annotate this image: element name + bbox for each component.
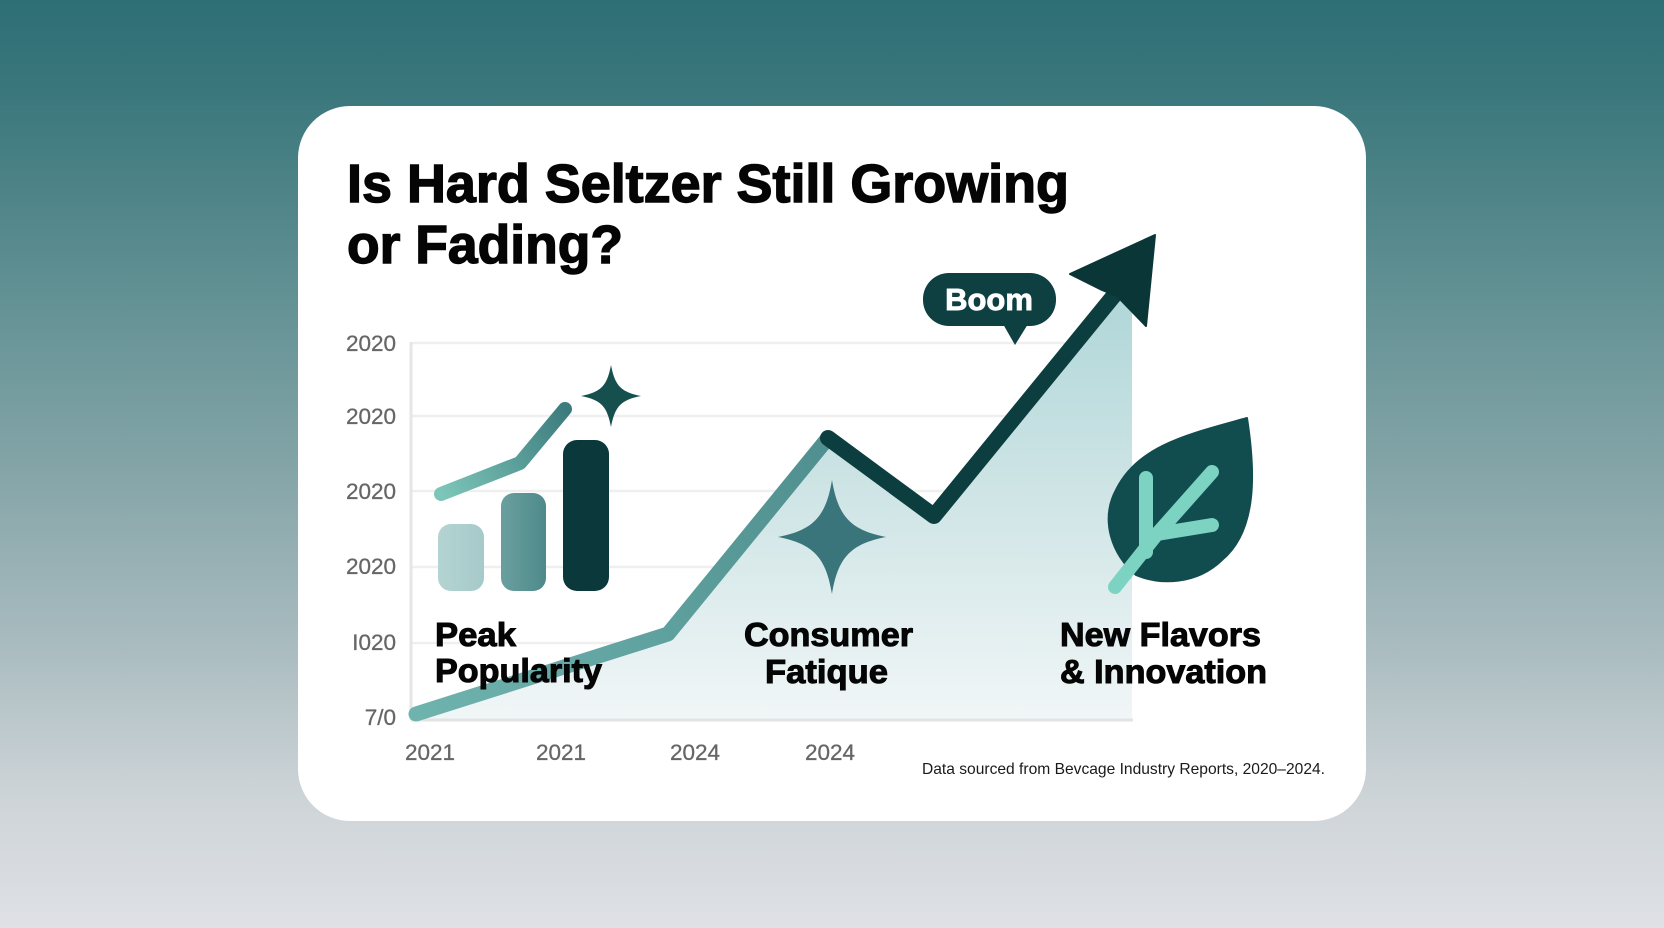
- arrowhead: [1070, 235, 1155, 326]
- y axis labels: [346, 331, 396, 730]
- panel: white card: [298, 106, 1366, 821]
- trend line: dip and boom: [828, 282, 1125, 516]
- x axis baseline: [411, 718, 1133, 722]
- label: Peak Popularity: [435, 616, 603, 689]
- icon: large sparkle: [778, 480, 886, 594]
- y axis labels: 7/0: [365, 705, 396, 730]
- label: New Flavors & Innovation: New Flavors: [1060, 616, 1261, 653]
- x axis labels: 2024: [805, 740, 855, 765]
- title: Is Hard Seltzer Still Growing: [347, 154, 1069, 214]
- x axis labels: 2024: [670, 740, 720, 765]
- label: Consumer Fatique: [744, 616, 913, 690]
- icon: leaf with veins: [1109, 418, 1252, 587]
- callout: Boom: [923, 273, 1056, 345]
- label: Peak Popularity: Popularity: [435, 652, 603, 689]
- label: Consumer Fatique: Consumer: [744, 616, 913, 653]
- x axis labels: 2021: [405, 740, 455, 765]
- y axis labels: 2020: [346, 554, 396, 579]
- label: Consumer Fatique: Fatique: [765, 653, 888, 690]
- chart gridlines and axes: [411, 342, 1132, 720]
- y axis labels: I020: [352, 630, 396, 655]
- icon: bars and mini trend line: [438, 409, 609, 591]
- title: [347, 154, 1069, 275]
- title: or Fading?: [347, 215, 623, 275]
- area under trend line: [411, 283, 1132, 720]
- trend line: rising phase: [416, 438, 828, 714]
- x axis labels: 2021: [536, 740, 586, 765]
- label: New Flavors & Innovation: [1060, 616, 1267, 690]
- y axis labels: 2020: [346, 331, 396, 356]
- icon: small sparkle: [581, 365, 641, 427]
- label: New Flavors & Innovation: & Innovation: [1060, 653, 1267, 690]
- y axis labels: 2020: [346, 479, 396, 504]
- x axis labels: [405, 740, 855, 765]
- source note: Data sourced from Bevcage Industry Reports, 2020–2024.: [922, 761, 1325, 778]
- y axis labels: 2020: [346, 404, 396, 429]
- label: Peak Popularity: Peak: [435, 616, 517, 653]
- callout: Boom: Boom: [945, 282, 1033, 317]
